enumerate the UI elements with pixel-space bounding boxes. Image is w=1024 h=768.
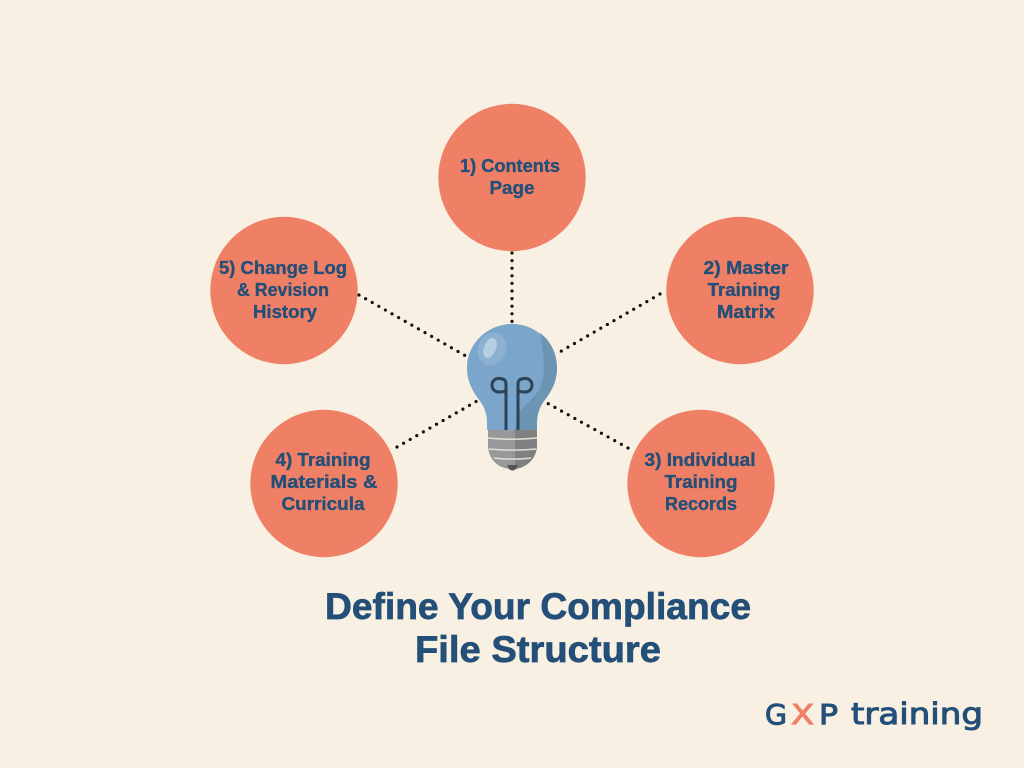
node 4: Training Materials & Curricula: Materials & bbox=[270, 472, 378, 492]
node 2: Master Training Matrix: Matrix bbox=[717, 302, 775, 322]
title: File Structure bbox=[415, 629, 661, 670]
title: Define Your Compliance bbox=[325, 586, 751, 627]
icon: light bulb bbox=[467, 324, 557, 470]
node 1: Contents Page bbox=[438, 104, 586, 251]
logo: GXP training bbox=[765, 697, 983, 731]
node 3: Individual Training Records bbox=[627, 410, 775, 557]
node 5: Change Log & Revision History: History bbox=[253, 302, 317, 322]
node 2: Master Training Matrix: Training bbox=[708, 280, 780, 300]
node 2: Master Training Matrix: 2) Master bbox=[704, 258, 788, 278]
node 4: Training Materials & Curricula: 4) Training bbox=[276, 450, 370, 470]
node 3: Individual Training Records: 3) Individual bbox=[644, 450, 756, 470]
logo: GXP training: P bbox=[819, 698, 838, 731]
node 1: Contents Page: Page bbox=[490, 178, 534, 198]
node 2: Master Training Matrix bbox=[666, 217, 814, 364]
node 1: Contents Page: 1) Contents bbox=[460, 156, 560, 176]
logo: GXP training: G bbox=[765, 698, 787, 731]
node 5: Change Log & Revision History bbox=[210, 217, 358, 364]
logo: GXP training: X bbox=[791, 698, 814, 731]
node 5: Change Log & Revision History: & Revision bbox=[237, 280, 329, 300]
node 5: Change Log & Revision History: 5) Change Log bbox=[219, 258, 347, 278]
node 3: Individual Training Records: Training bbox=[664, 472, 738, 492]
node 3: Individual Training Records: Records bbox=[665, 494, 737, 514]
node 4: Training Materials & Curricula bbox=[250, 410, 398, 557]
node 4: Training Materials & Curricula: Curricula bbox=[282, 494, 366, 514]
logo: GXP training: training bbox=[851, 697, 983, 731]
title bbox=[325, 586, 751, 670]
